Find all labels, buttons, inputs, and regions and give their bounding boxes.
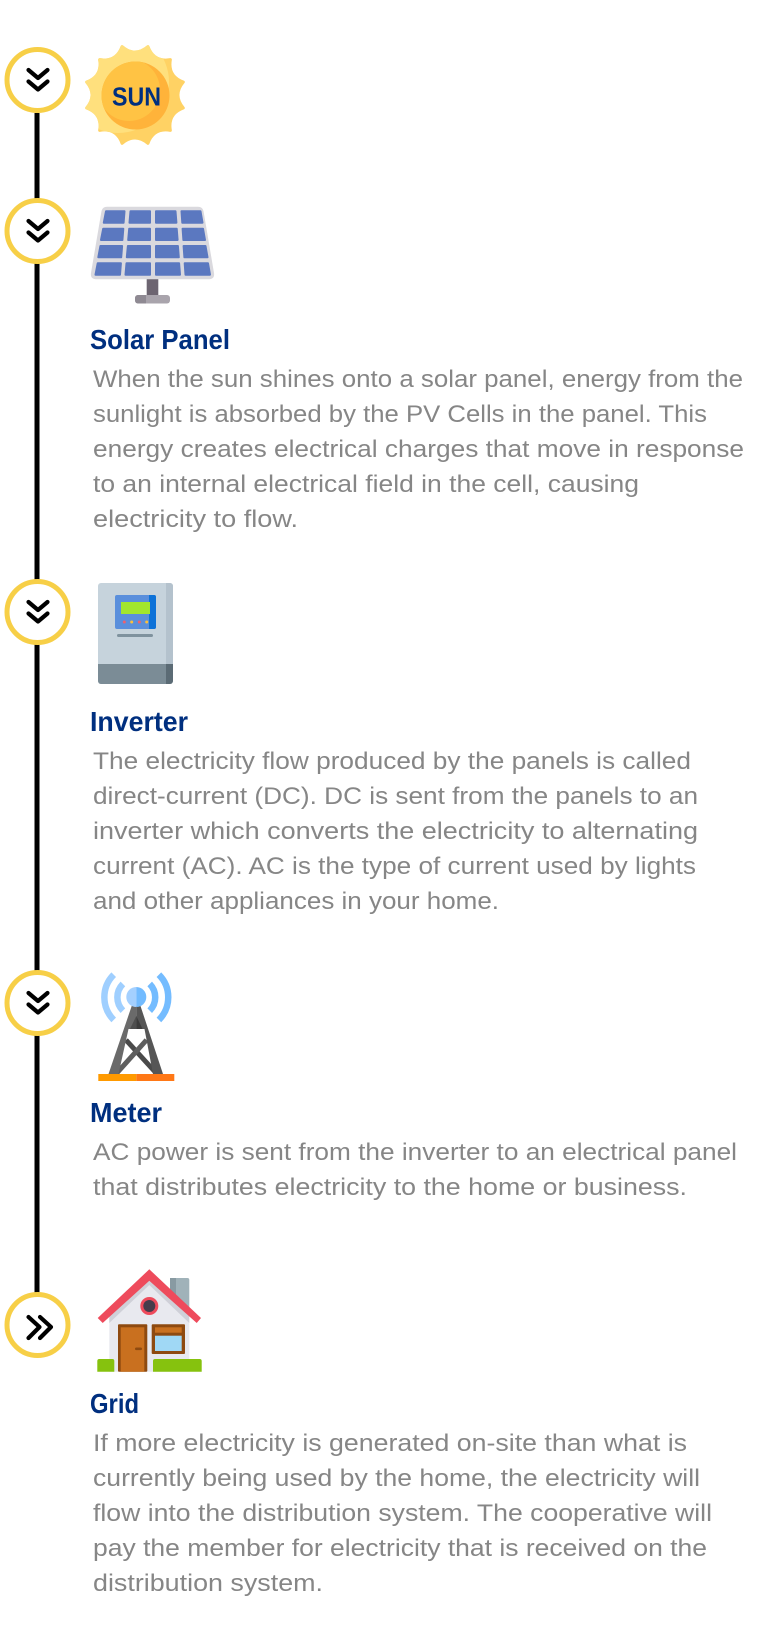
- text block: inverter description: The electricity flow produced by the panels is called: [93, 748, 691, 775]
- step marker: grid: [7, 1294, 68, 1356]
- step marker: solar panel: [7, 200, 68, 262]
- text block: meter description: AC power is sent from the inverter to an electrical panel: [93, 1139, 737, 1166]
- text block: inverter description: direct-current (DC). DC is sent from the panels to an: [93, 783, 698, 810]
- text block: inverter description: inverter which converts the electricity to alternating: [93, 818, 698, 845]
- text block: inverter description: [93, 748, 698, 915]
- icon: sun: [85, 45, 185, 145]
- text block: solar panel description: to an internal electrical field in the cell, causing: [93, 471, 639, 498]
- step marker: inverter: [7, 582, 68, 642]
- icon: house: [97, 1269, 202, 1372]
- text block: solar panel description: When the sun shines onto a solar panel, energy from the: [93, 366, 743, 393]
- heading: Grid: Grid: [90, 1388, 139, 1419]
- icon: sun: SUN: [112, 82, 161, 112]
- icon: solar panel: [91, 207, 214, 304]
- text block: grid description: distribution system.: [93, 1570, 323, 1597]
- text block: grid description: If more electricity is generated on-site than what is: [93, 1430, 687, 1457]
- step marker: sun: [7, 50, 68, 110]
- text block: grid description: currently being used by the home, the electricity will: [93, 1465, 700, 1492]
- icon: meter tower: [98, 975, 174, 1081]
- text block: solar panel description: sunlight is absorbed by the PV Cells in the panel. This: [93, 401, 707, 428]
- step marker: meter: [7, 972, 68, 1034]
- text block: solar panel description: electricity to flow.: [93, 506, 298, 533]
- text block: grid description: pay the member for electricity that is received on the: [93, 1535, 707, 1562]
- text block: grid description: flow into the distribution system. The cooperative will: [93, 1500, 712, 1527]
- heading: Inverter: Inverter: [90, 706, 188, 737]
- text block: solar panel description: energy creates electrical charges that move in response: [93, 436, 744, 463]
- icon: inverter: [98, 583, 173, 684]
- heading: Solar Panel: Solar Panel: [90, 324, 230, 355]
- text block: inverter description: current (AC). AC is the type of current used by lights: [93, 853, 696, 880]
- text block: grid description: [93, 1430, 712, 1597]
- timeline line: [34, 113, 40, 1293]
- text block: solar panel description: [93, 366, 744, 533]
- heading: Meter: Meter: [90, 1097, 162, 1128]
- text block: meter description: that distributes electricity to the home or business.: [93, 1174, 687, 1201]
- text block: inverter description: and other appliances in your home.: [93, 888, 499, 915]
- text block: meter description: [93, 1139, 737, 1201]
